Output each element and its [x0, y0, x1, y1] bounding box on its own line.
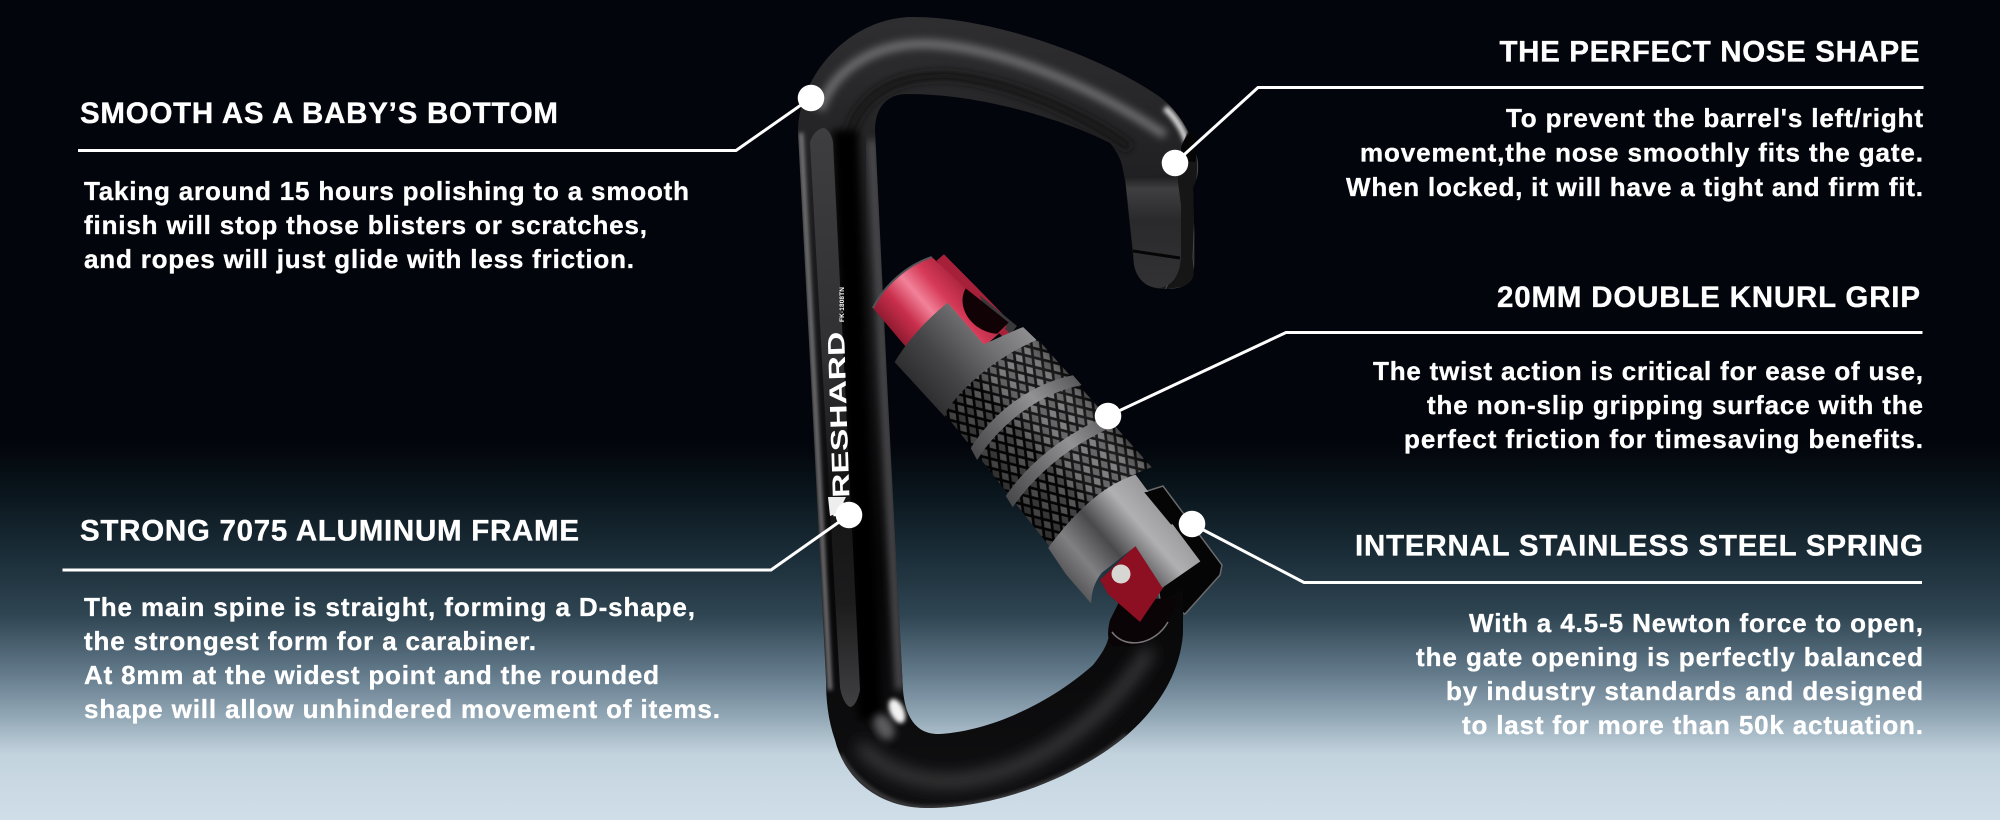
- body text: [1373, 356, 1923, 454]
- body text: At 8mm at the widest point and the rounded: [84, 660, 659, 690]
- body text: movement,the nose smoothly fits the gate.: [1360, 138, 1923, 168]
- body text: The main spine is straight, forming a D-shape,: [84, 592, 695, 622]
- heading: 20MM DOUBLE KNURL GRIP: [1497, 281, 1920, 314]
- leader line: [1192, 524, 1922, 582]
- end rim: [868, 251, 932, 308]
- socket rim light: [1112, 622, 1168, 643]
- body text: [84, 592, 720, 724]
- body text: Taking around 15 hours polishing to a smooth: [84, 176, 689, 206]
- body text: To prevent the barrel's left/right: [1506, 103, 1923, 133]
- knurl shading: [935, 330, 1152, 552]
- knurl body: [935, 330, 1152, 552]
- leader line: [62, 515, 849, 570]
- heading: STRONG 7075 ALUMINUM FRAME: [80, 514, 579, 548]
- lower edge rim light: [840, 735, 1127, 808]
- marker dot: [798, 85, 824, 111]
- upper smooth collar: [888, 274, 1040, 423]
- body text: perfect friction for timesaving benefits.: [1404, 424, 1923, 454]
- panel: smooth finish: [78, 85, 824, 274]
- grip ring one: [964, 361, 1082, 469]
- body text: With a 4.5-5 Newton force to open,: [1469, 608, 1923, 638]
- spine centre dark band: [832, 130, 882, 720]
- rear tab: [936, 250, 1015, 338]
- body text: shape will allow unhindered movement of items.: [84, 694, 720, 724]
- leader line: [78, 98, 811, 150]
- grip ring two: [1000, 406, 1116, 512]
- body text: and ropes will just glide with less friction.: [84, 244, 634, 274]
- slot: [952, 282, 1009, 341]
- nose hook plate: [1125, 175, 1181, 288]
- leader line: [1108, 332, 1922, 416]
- heading: THE PERFECT NOSE SHAPE: [1500, 36, 1920, 68]
- marker dot: [836, 502, 862, 528]
- dark tab behind slot: [975, 290, 1018, 337]
- body text: When locked, it will have a tight and firm fit.: [1346, 172, 1923, 202]
- body text: The twist action is critical for ease of use,: [1373, 356, 1923, 386]
- body text: [1416, 608, 1923, 740]
- gate back plate: [1144, 486, 1222, 614]
- panel: aluminum frame: [62, 502, 862, 724]
- panel: stainless spring: [1179, 511, 1923, 740]
- logo wordmark: FRESHARD: [824, 331, 856, 519]
- marker dot: [1162, 150, 1188, 176]
- heading: SMOOTH AS A BABY’S BOTTOM: [80, 97, 558, 130]
- body text: the non-slip gripping surface with the: [1427, 390, 1923, 420]
- collar slot: [1143, 484, 1184, 528]
- leader line: [1175, 88, 1924, 163]
- body text: to last for more than 50k actuation.: [1462, 710, 1923, 740]
- red lock window: [1100, 546, 1165, 622]
- nose glint: [1165, 108, 1190, 152]
- arch highlight: [820, 44, 1165, 135]
- nose plate groove: [1133, 251, 1180, 258]
- logo swoosh: [828, 497, 846, 516]
- panel: knurl grip: [1095, 281, 1923, 454]
- red tube: [867, 244, 1007, 386]
- body text: by industry standards and designed: [1446, 676, 1923, 706]
- socket interior: [1108, 598, 1177, 646]
- locking pin: [1112, 564, 1130, 584]
- nose side: [1165, 131, 1198, 290]
- marker dot: [1179, 511, 1205, 537]
- carabiner product illustration: [780, 0, 1222, 820]
- inner bend glints: [885, 696, 909, 726]
- body text: [1346, 103, 1923, 202]
- body text: the strongest form for a carabiner.: [84, 626, 536, 656]
- nose recess: [1181, 131, 1197, 162]
- arch inner dark band: [848, 76, 1130, 148]
- spine inner edge light: [872, 140, 900, 690]
- carabiner frame: [798, 17, 1198, 808]
- marker dot: [1095, 403, 1121, 429]
- body text: the gate opening is perfectly balanced: [1416, 642, 1923, 672]
- model number: FK-1808TN: [839, 287, 846, 322]
- gate barrel, local coordinates along its axis: [846, 232, 1220, 634]
- heading: INTERNAL STAINLESS STEEL SPRING: [1355, 530, 1923, 562]
- panel: nose shape: [1162, 36, 1924, 202]
- body text: [84, 176, 689, 274]
- spine flat face: [810, 128, 860, 707]
- lower smooth collar: [1040, 467, 1206, 634]
- lower curve highlight: [860, 650, 1150, 781]
- spine left highlight: [801, 133, 830, 690]
- body text: finish will stop those blisters or scratches,: [84, 210, 647, 240]
